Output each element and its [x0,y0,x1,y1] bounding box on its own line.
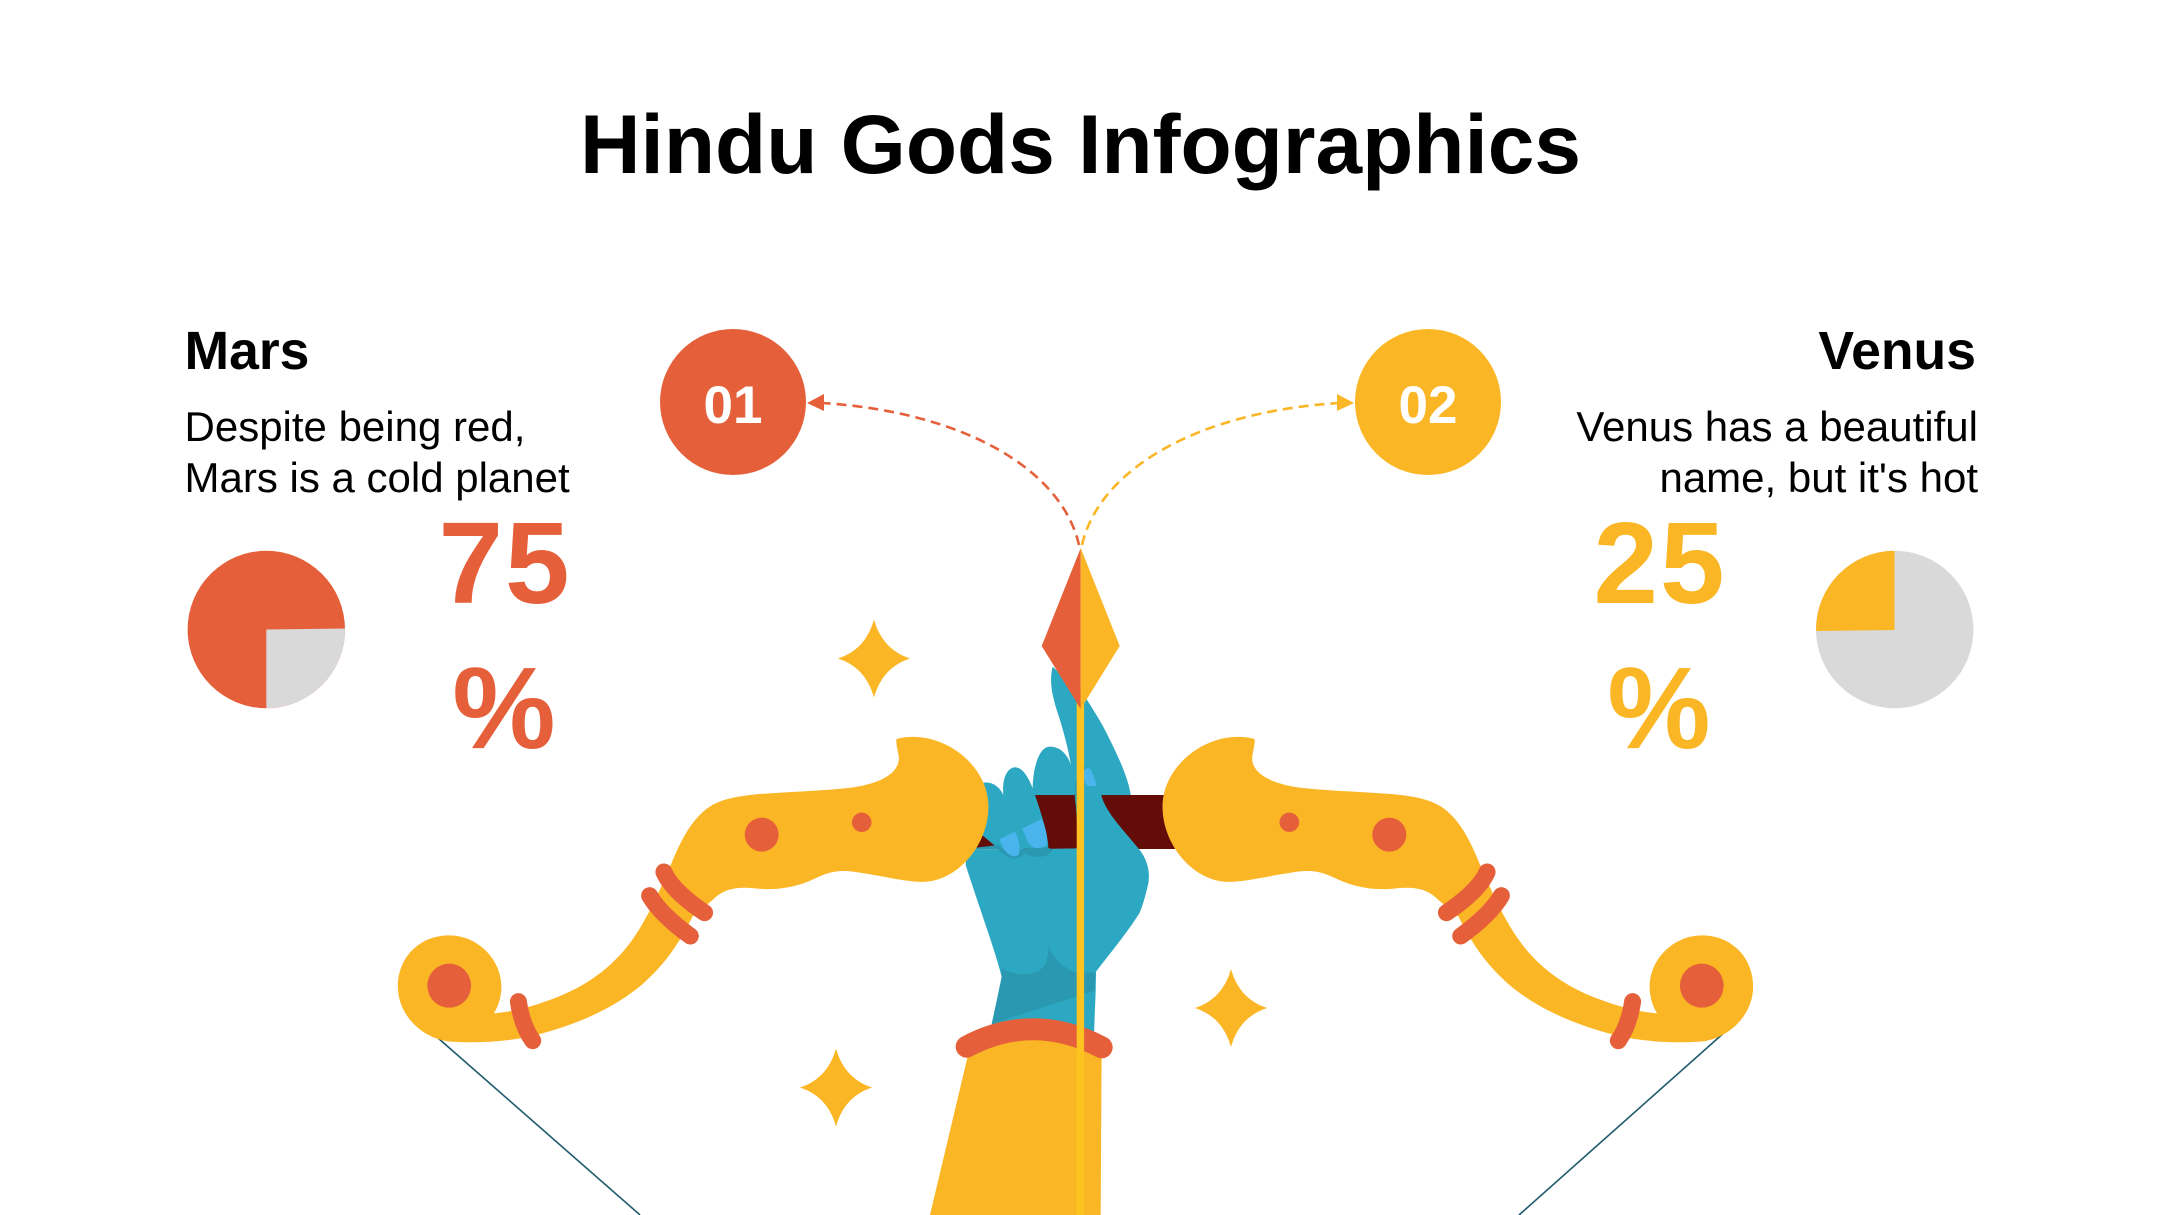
Venus percentage: 25 [1593,498,1727,628]
Venus description: name, but it's hot [1659,454,1978,501]
title: Hindu Gods Infographics [580,97,1581,191]
Mars heading: Mars [184,322,309,381]
right bow limb [1163,737,1753,1042]
Mars percentage: 75 [438,498,572,628]
Venus percentage: % [1607,643,1713,773]
bracelet [967,1029,1102,1047]
marker 02 [1355,329,1501,475]
bow strings [438,1023,1735,1215]
Venus pie chart [1816,551,1973,708]
palm and thumb [966,766,1149,1033]
wrist shading [992,945,1096,1024]
marker 02: 02 [1399,376,1457,435]
thumbnail [1083,768,1096,786]
hand behind bow grip [1033,667,1131,797]
marker 01 [660,329,806,475]
hand gripping bow [930,766,1149,1215]
thumb shading [1075,766,1087,828]
decorative star lower left [800,1048,872,1126]
panel: Venus [1576,322,1978,773]
left bow limb [398,737,988,1042]
Mars percentage: % [452,643,558,773]
Mars description: Mars is a cold planet [184,454,570,501]
Mars pie chart [188,551,345,708]
fingers [977,767,1048,853]
Mars description: Despite being red, [184,403,525,450]
arrowhead [1042,548,1120,709]
fingernail two [1022,819,1047,848]
Venus heading: Venus [1818,322,1976,381]
bow grip bar [960,795,1180,849]
marker 01: 01 [704,376,762,435]
sleeve [930,1032,1102,1215]
Venus description: Venus has a beautiful [1576,403,1978,450]
panel: Mars [184,322,572,773]
arrow to marker 02 [1082,394,1354,545]
decorative star right [1195,969,1267,1047]
decorative star upper left [838,620,910,698]
arrow to marker 01 [807,394,1079,545]
arrow shaft [1077,690,1084,1215]
finger shadow [967,845,1053,858]
fingernail one [999,832,1019,856]
